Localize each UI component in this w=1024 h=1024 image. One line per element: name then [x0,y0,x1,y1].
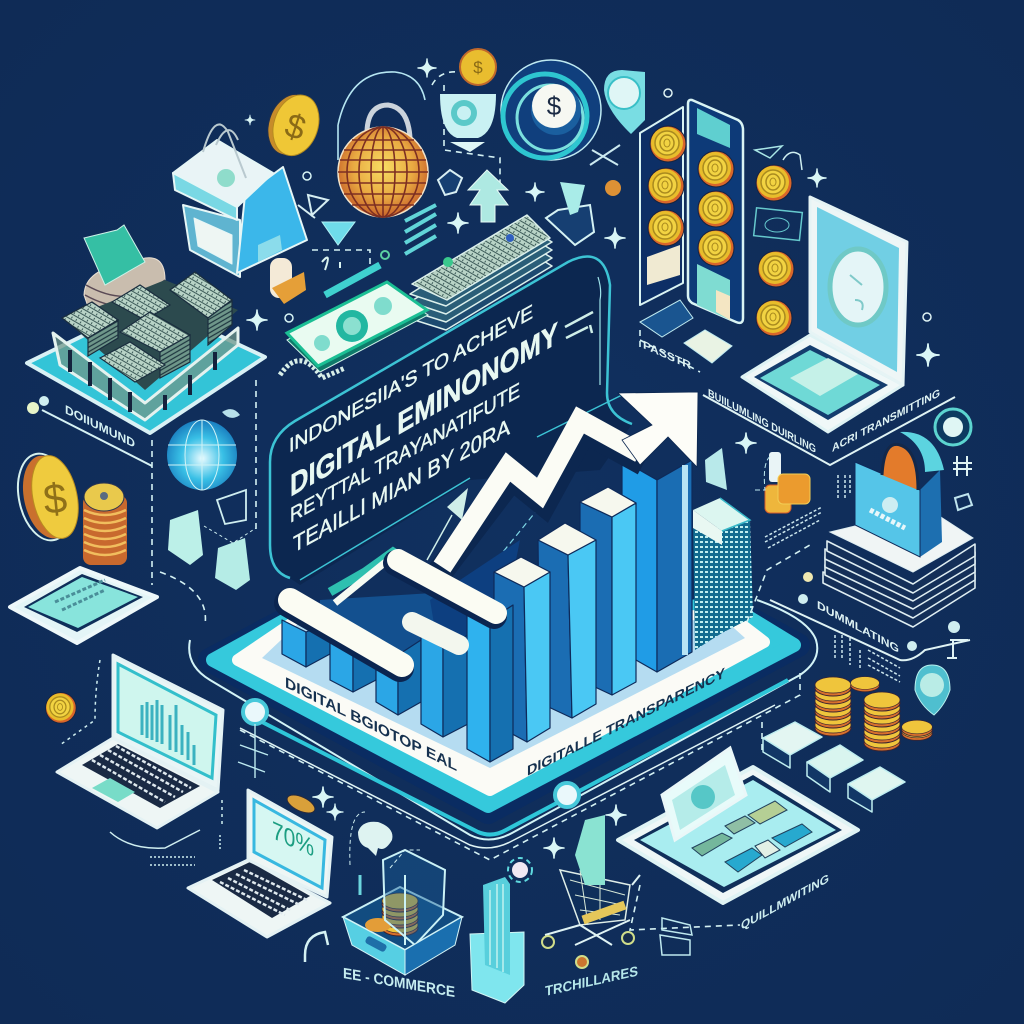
gold tokens and bottle right [755,452,810,513]
panel title text [289,300,558,559]
nodes on platform [238,700,579,807]
laptop right [742,197,907,432]
standing folder [662,748,746,840]
location pin top [604,70,645,134]
small cards near globe [168,490,256,590]
platform label left: DIGITAL BGIOTOP EAL [285,675,457,775]
sparkles [245,59,939,858]
e-commerce caption: EE - COMMERCE [343,965,455,1001]
laptop left [57,655,223,828]
crystal tower [470,877,524,1003]
small padlock [270,258,306,304]
globe left [167,409,240,490]
small book and card: PASSTR [643,339,692,373]
phone with coins right [688,100,743,323]
scissors icon [590,145,620,165]
dashed path under left laptop [60,660,222,865]
coin stack left [83,483,127,565]
data block tower [693,498,753,650]
cart caption: TRCHILLARES [545,964,638,1000]
lower right caption: QUILLMWITING [741,870,829,933]
small coin top: $ [473,58,483,77]
tablet lower right [618,748,858,903]
coin near left laptop [46,693,76,723]
central platform [189,540,817,848]
large coin left [10,449,85,545]
gold coin stacks lower right [815,677,932,751]
shopping cart [542,815,640,968]
right caption lower: DUMMLATING [817,598,899,656]
bar 5 [467,605,513,762]
laptop lower: 70% [272,815,314,863]
cube icon [438,170,462,195]
panel title text: INDONESIIA'S TO ACHEVE [289,300,533,458]
dollar bill [280,282,428,378]
teal cup icon [440,94,496,152]
dollar disc [501,60,601,160]
bar 7 [538,523,596,718]
large gold coin top: $ [280,106,310,148]
shopping bag top left [173,124,307,277]
panel title text: REYTTAL TRAYANATIFUTE [290,378,520,528]
small icons cluster top [285,145,621,322]
basket caption: DOIIUMUND [65,402,135,451]
chat bubble [350,812,420,895]
growth arrow [288,392,698,668]
central title panel [270,257,632,590]
large gold coin top [260,87,326,163]
diamond icon [322,222,355,245]
right caption band [703,386,955,465]
small book right of arrow [705,448,727,490]
up arrow icon [468,170,508,222]
bar 1 [282,620,330,667]
dollar disc: $ [547,91,562,121]
right caption band: BUIILUMLING DUIRLING [708,387,816,456]
wire globe with padlock [338,72,428,217]
basket of money [27,225,265,433]
basket caption [27,396,152,466]
note icon [660,918,692,955]
money stack top [408,215,552,330]
tray with gem [546,182,594,245]
text lines right [765,475,900,682]
coins beside phones [754,146,802,336]
icons far right [664,89,972,715]
phone with coins left [640,107,686,305]
bag on paper stack [823,432,975,627]
panel title text: TEAILLI MIAN BY 20RA [293,414,510,559]
bar 8 [580,487,636,695]
small doodle text [322,251,389,295]
three small tiles [763,722,905,812]
right caption lower [770,572,970,660]
bar 9 [622,460,692,672]
bar 2 [330,638,376,692]
bar 3 [376,640,421,715]
platform label right: DIGITALLE TRANSPARENCY [527,666,725,780]
laptop lower [188,790,332,962]
small coin top [460,49,496,85]
right caption band: ACRI TRANSMITTING [832,386,940,455]
stripes icon [405,205,436,254]
bar chart [282,460,692,762]
flower icon [508,858,532,882]
connector dashed lines [152,72,810,930]
tablet lower left [10,568,157,643]
panel title text: DIGITAL EMINONOMY [290,316,558,504]
bar 6 [494,557,550,742]
box with coins [343,850,462,975]
small book and card [640,300,732,373]
bow icon [298,195,328,218]
large coin left: $ [41,474,69,523]
bar 4 [421,635,468,737]
